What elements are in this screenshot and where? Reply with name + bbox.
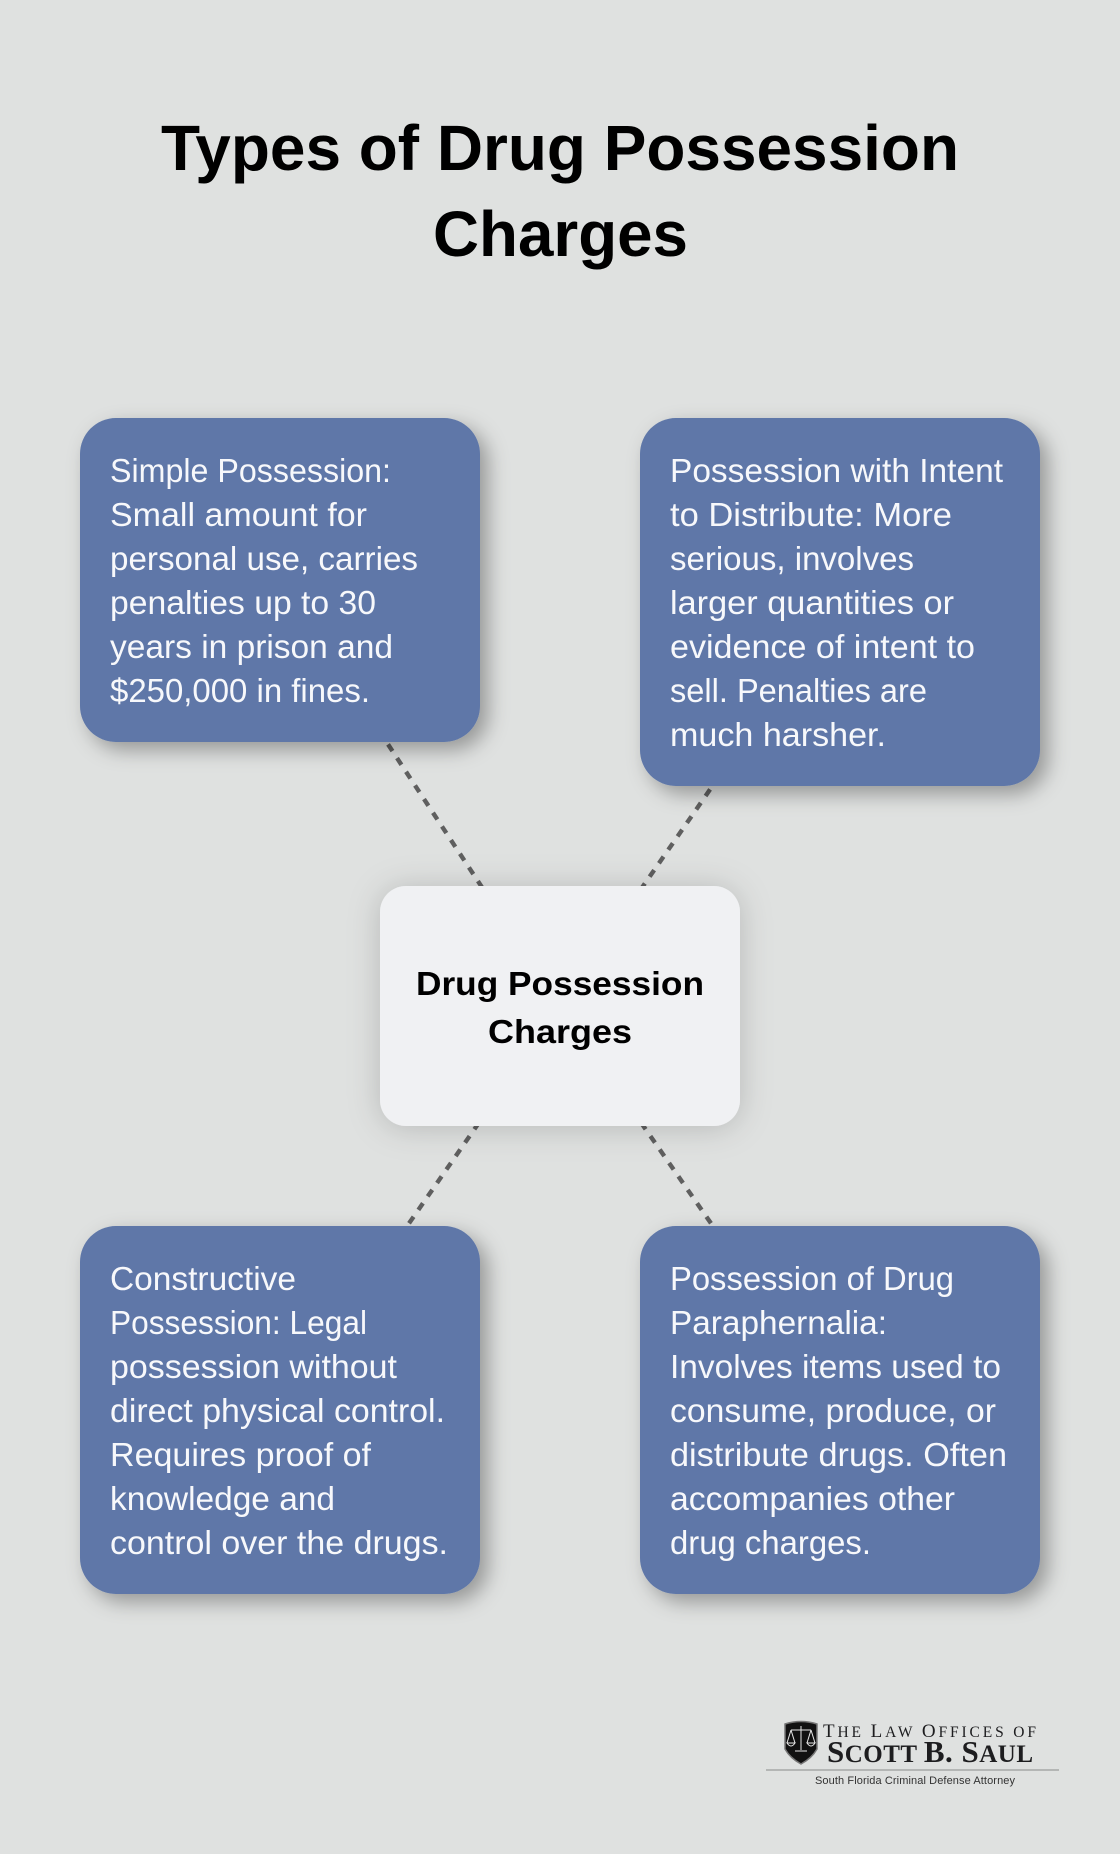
panel: simple possession: Small amount for	[110, 496, 367, 533]
panel: possession with intent to distribute: evidence of intent to	[670, 628, 975, 665]
panel: simple possession: penalties up to 30	[110, 584, 376, 621]
panel: center drug possession charges	[380, 886, 740, 1126]
logo: the law offices of scott b. saul: SCOTT B. SAUL	[827, 1734, 1033, 1769]
panel: possession of drug paraphernalia: distribute drugs. Often	[670, 1436, 1007, 1473]
panel: possession of drug paraphernalia: accompanies other	[670, 1480, 955, 1517]
panel: possession with intent to distribute: to Distribute: More	[670, 496, 952, 533]
panel: possession of drug paraphernalia: Paraphernalia:	[670, 1304, 887, 1341]
logo: the law offices of scott b. saul	[766, 1721, 1059, 1787]
panel: constructive possession: control over the drugs.	[110, 1524, 448, 1561]
panel: constructive possession: Requires proof of	[110, 1436, 372, 1473]
panel: simple possession: $250,000 in fines.	[110, 672, 370, 709]
panel: simple possession: Simple Possession:	[110, 452, 391, 489]
panel: possession of drug paraphernalia: consume, produce, or	[670, 1392, 996, 1429]
panel: possession of drug paraphernalia: Possession of Drug	[670, 1260, 954, 1297]
panel: center drug possession charges: Drug Possession	[416, 965, 704, 1002]
logo: the law offices of scott b. saul: South Florida Criminal Defense Attorney	[815, 1775, 1016, 1787]
panel: possession with intent to distribute: sell. Penalties are	[670, 672, 927, 709]
title: Charges	[433, 198, 688, 270]
panel: possession with intent to distribute: larger quantities or	[670, 584, 954, 621]
panel: center drug possession charges: Charges	[488, 1013, 632, 1050]
connector: intent to distribute to center	[560, 602, 840, 1006]
icon: shield with scales	[785, 1722, 817, 1764]
connector: paraphernalia to center	[560, 1006, 840, 1409]
title: Types of Drug Possession	[161, 112, 959, 184]
connector: constructive possession to center	[280, 1006, 560, 1409]
panel: constructive possession: possession without	[110, 1348, 397, 1385]
panel: possession of drug paraphernalia: drug charges.	[670, 1524, 871, 1561]
panel: constructive possession: Constructive	[110, 1260, 296, 1297]
panel: simple possession: years in prison and	[110, 628, 393, 665]
panel: simple possession	[80, 418, 480, 742]
title	[161, 112, 959, 270]
panel: constructive possession: knowledge and	[110, 1480, 335, 1517]
panel: constructive possession: direct physical control.	[110, 1392, 445, 1429]
connector: simple possession to center	[280, 580, 560, 1006]
panel: possession with intent to distribute: Possession with Intent	[670, 452, 1003, 489]
panel: possession of drug paraphernalia: Involves items used to	[670, 1348, 1001, 1385]
panel: constructive possession	[80, 1226, 480, 1594]
logo: the law offices of scott b. saul: THE LAW OFFICES OF	[823, 1721, 1036, 1742]
panel: possession with intent to distribute: much harsher.	[670, 716, 886, 753]
panel: constructive possession: Possession: Legal	[110, 1304, 367, 1341]
panel: simple possession: personal use, carries	[110, 540, 418, 577]
panel: possession with intent to distribute	[640, 418, 1040, 786]
panel: possession with intent to distribute: serious, involves	[670, 540, 914, 577]
panel: possession of drug paraphernalia	[640, 1226, 1040, 1594]
